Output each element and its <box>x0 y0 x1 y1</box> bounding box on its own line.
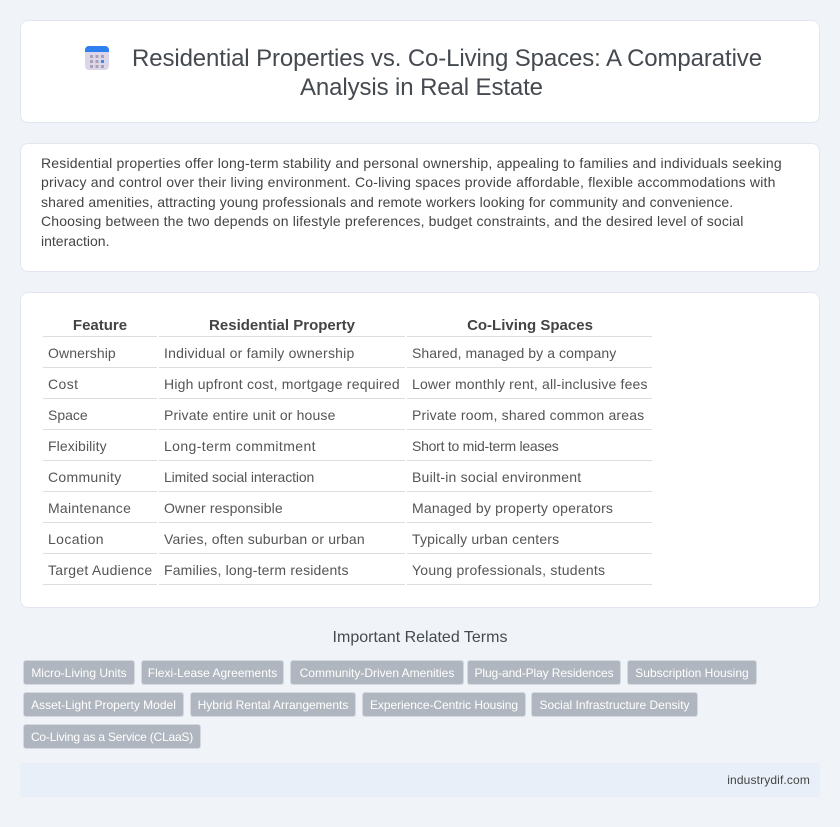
comparison table: Long-term commitment <box>164 438 316 454</box>
comparison table: Individual or family ownership <box>164 345 355 361</box>
table header: Residential Property <box>209 317 355 334</box>
comparison table: Families, long-term residents <box>164 562 349 578</box>
comparison table: Lower monthly rent, all-inclusive fees <box>412 376 648 392</box>
intro text: shared amenities, attracting young professionals and remote workers looking for community and convenience. <box>41 194 733 210</box>
comparison table: Target Audience <box>48 562 152 578</box>
text: Residential Properties vs. Co-Living Spaces: A Comparative <box>132 45 762 72</box>
intro text: privacy and control over their living environment. Co-living spaces provide affordable, flexible accommodations with <box>41 174 776 190</box>
title panel <box>20 20 820 123</box>
comparison table: High upfront cost, mortgage required <box>164 376 400 392</box>
comparison table: Space <box>48 407 88 423</box>
related terms tags: Experience-Centric Housing <box>370 698 518 712</box>
comparison table: Ownership <box>48 345 116 361</box>
comparison table: Managed by property operators <box>412 500 613 516</box>
table header <box>73 317 593 334</box>
comparison table: Private room, shared common areas <box>412 407 644 423</box>
intro text <box>41 155 782 249</box>
footer bar <box>20 763 820 797</box>
footer source: industrydif.com <box>727 773 810 787</box>
related terms heading: Important Related Terms <box>333 629 507 646</box>
comparison table: Flexibility <box>48 438 107 454</box>
panel: comparison table <box>20 292 820 608</box>
related terms tags <box>23 660 757 749</box>
intro text: Choosing between the two depends on lifestyle preferences, budget constraints, and the desired level of social <box>41 213 743 229</box>
comparison table: Private entire unit or house <box>164 407 336 423</box>
related terms tags: Micro-Living Units <box>31 666 127 680</box>
related terms tags: Asset-Light Property Model <box>31 698 176 712</box>
comparison table: Built-in social environment <box>412 469 581 485</box>
intro text: interaction. <box>41 233 109 249</box>
comparison table: Maintenance <box>48 500 131 516</box>
related terms tags: Subscription Housing <box>635 666 749 680</box>
comparison table: Community <box>48 469 122 485</box>
text: Analysis in Real Estate <box>300 74 543 101</box>
comparison table: Limited social interaction <box>164 469 314 485</box>
related terms tags: Hybrid Rental Arrangements <box>198 698 348 712</box>
comparison table: Cost <box>48 376 78 392</box>
related terms tags: Flexi-Lease Agreements <box>148 666 277 680</box>
table header: Feature <box>73 317 127 334</box>
intro text: Residential properties offer long-term stability and personal ownership, appealing to families and individuals seeking <box>41 155 782 171</box>
comparison table: Owner responsible <box>164 500 283 516</box>
comparison table <box>43 317 652 585</box>
related terms tags: Co-Living as a Service (CLaaS) <box>31 730 193 744</box>
table header: Co-Living Spaces <box>467 317 593 334</box>
icon: calendar <box>85 46 109 70</box>
comparison table: Short to mid-term leases <box>412 438 558 454</box>
comparison table: Typically urban centers <box>412 531 559 547</box>
related terms tags: Social Infrastructure Density <box>539 698 690 712</box>
related terms tags: Plug-and-Play Residences <box>474 666 614 680</box>
title <box>132 45 762 101</box>
related terms tags: Community-Driven Amenities <box>300 666 454 680</box>
comparison table: Shared, managed by a company <box>412 345 616 361</box>
panel: introduction <box>20 143 820 272</box>
comparison table: Varies, often suburban or urban <box>164 531 365 547</box>
comparison table: Location <box>48 531 104 547</box>
comparison table: Young professionals, students <box>412 562 605 578</box>
